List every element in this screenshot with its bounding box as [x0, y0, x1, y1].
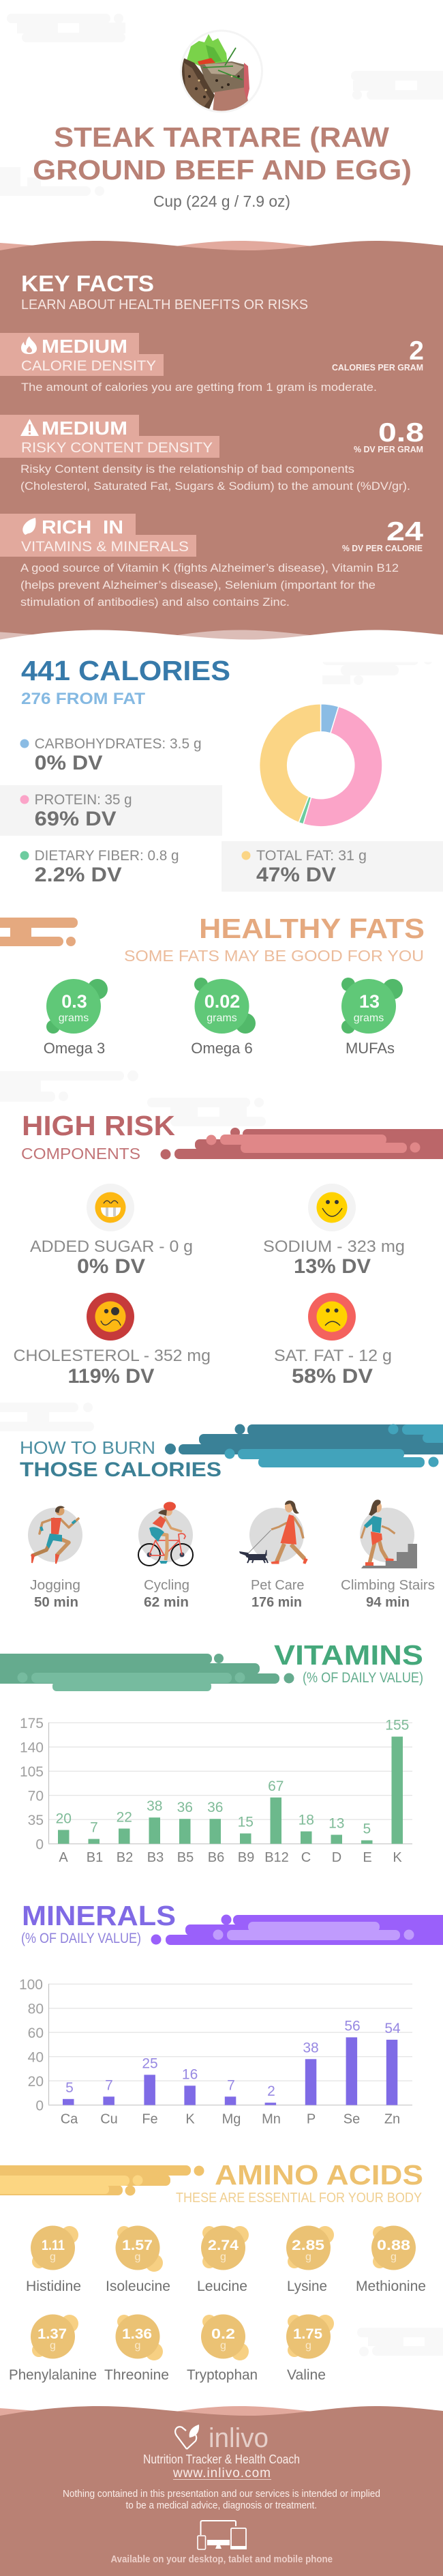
bar chart: vitamins: 22	[117, 1809, 132, 1825]
activity: cycling	[138, 1502, 193, 1566]
amino: histidine: 1.11	[42, 2238, 65, 2253]
bar chart: vitamins: 155	[385, 1718, 409, 1733]
item: sodium: SODIUM - 323 mg	[263, 1238, 405, 1256]
legend: carbohydrates: CARBOHYDRATES: 3.5 g	[35, 736, 202, 752]
item: cholesterol: CHOLESTEROL - 352 mg	[14, 1347, 211, 1365]
bar chart: minerals: 38	[303, 2040, 319, 2055]
subheading: from fat: 276 FROM FAT	[21, 690, 145, 708]
bar chart: vitamins: B5	[177, 1850, 194, 1865]
bar chart: vitamins: A	[59, 1850, 68, 1865]
icon: flame	[21, 336, 37, 354]
amino: methionine: 0.88	[377, 2238, 410, 2253]
badge: MUFAs: grams	[354, 1012, 384, 1024]
value: 24	[386, 517, 423, 546]
disclaimer	[63, 2489, 380, 2511]
bar chart: vitamins: D	[332, 1850, 341, 1865]
amino: lysine: 2.85	[292, 2238, 324, 2253]
activity: climbing stairs	[360, 1499, 417, 1568]
legend: total fat: TOTAL FAT: 31 g	[256, 848, 367, 864]
item: added sugar: ADDED SUGAR - 0 g	[30, 1238, 193, 1256]
amino: lysine: g	[305, 2251, 311, 2263]
logo: inlivo: inlivo	[209, 2423, 269, 2453]
panel: minerals	[19, 1900, 443, 2127]
bar chart: vitamins: 35	[28, 1813, 44, 1828]
legend: dietary fiber	[20, 848, 179, 886]
label: CALORIE DENSITY	[21, 358, 156, 374]
amino: valine: Valine	[287, 2367, 326, 2383]
heading: those calories: THOSE CALORIES	[20, 1459, 222, 1481]
amino: valine: 1.75	[293, 2326, 322, 2342]
activity label: pet care	[251, 1578, 304, 1610]
badge: omega 3: 0.3	[61, 991, 87, 1012]
icon: devices	[198, 2521, 247, 2549]
panel: calories	[0, 655, 443, 892]
activity label: cycling: Cycling	[144, 1578, 189, 1593]
amino: isoleucine: 1.57	[122, 2238, 153, 2253]
legend: carbohydrates	[20, 736, 202, 774]
bar chart: vitamins: 13	[329, 1816, 344, 1831]
unit: % DV PER CALORIE	[342, 543, 423, 553]
title: GROUND BEEF AND EGG)	[33, 154, 412, 186]
badge: MUFAs: 13	[359, 991, 380, 1012]
amino: threonine: g	[135, 2340, 140, 2352]
bar chart: minerals: Fe	[142, 2112, 158, 2127]
amino: tryptophan: g	[220, 2340, 226, 2352]
bar chart: minerals: 7	[227, 2077, 235, 2093]
bar chart: vitamins: K	[393, 1850, 402, 1865]
bar chart: vitamins	[20, 1716, 412, 1865]
bar chart: minerals: Zn	[384, 2112, 400, 2127]
bar chart: vitamins: 7	[90, 1820, 98, 1836]
title: STEAK TARTARE (RAW	[54, 121, 389, 153]
amino: leucine: 2.74	[208, 2238, 239, 2253]
activity: pet care	[239, 1500, 307, 1564]
panel: high risk components	[14, 1110, 443, 1388]
bar chart: vitamins: B12	[264, 1850, 289, 1865]
item: sodium	[263, 1184, 405, 1278]
subheading: SOME FATS MAY BE GOOD FOR YOU	[124, 947, 424, 965]
legend: carbohydrates: 0% DV	[35, 752, 103, 774]
bar chart: vitamins: 105	[20, 1764, 44, 1780]
label: RISKY CONTENT DENSITY	[21, 440, 213, 456]
bar chart: minerals: 80	[28, 2002, 44, 2017]
bar chart: vitamins: 0	[35, 1836, 44, 1853]
description: Risky Content density is the relationship of bad components	[20, 463, 354, 475]
amino: leucine: Leucine	[197, 2279, 247, 2294]
panel: key facts	[0, 241, 443, 662]
badge: omega 6: 0.02	[204, 991, 240, 1012]
amino: threonine: 1.36	[122, 2326, 152, 2342]
value: 2	[409, 336, 424, 366]
legend: protein: 69% DV	[35, 808, 117, 830]
description: The amount of calories you are getting from 1 gram is moderate.	[21, 381, 377, 394]
amino: isoleucine	[106, 2225, 170, 2294]
amino: tryptophan	[187, 2314, 258, 2383]
tagline: Nutrition Tracker & Health Coach	[143, 2453, 300, 2466]
bar chart: minerals: 20	[28, 2074, 44, 2090]
amino: isoleucine: g	[135, 2251, 140, 2263]
icon: steak photo in circle	[180, 30, 263, 113]
bar chart: vitamins: 140	[20, 1740, 44, 1756]
badge: omega 3	[44, 979, 108, 1057]
disclaimer: to be a medical advice, diagnosis or treatment.	[125, 2500, 317, 2511]
rating: MEDIUM	[42, 418, 127, 439]
bar chart: vitamins: 70	[28, 1789, 44, 1804]
bar chart: vitamins: 5	[363, 1821, 371, 1837]
amino: leucine	[197, 2225, 249, 2294]
subheading: THESE ARE ESSENTIAL FOR YOUR BODY	[176, 2191, 422, 2206]
item: saturated fat: 58% DV	[292, 1365, 373, 1388]
bar chart: minerals: 25	[142, 2055, 158, 2071]
amino: methionine: g	[391, 2251, 397, 2263]
bar chart: vitamins: 67	[268, 1779, 284, 1794]
badge: omega 6	[191, 978, 256, 1057]
bar chart: vitamins: 38	[147, 1798, 162, 1814]
description: A good source of Vitamin K (fights Alzheimer’s disease), Vitamin B12	[20, 561, 399, 574]
badge: omega 3: grams	[59, 1012, 89, 1024]
bar chart: vitamins: B3	[147, 1850, 164, 1865]
bar chart: minerals: 100	[19, 1977, 43, 1993]
badge: MUFAs: MUFAs	[346, 1040, 395, 1057]
panel: how to burn those calories	[20, 1424, 443, 1610]
amino: tryptophan: 0.2	[211, 2326, 235, 2342]
amino: valine: g	[305, 2340, 311, 2352]
bar chart: vitamins: C	[301, 1850, 311, 1865]
item: sodium: 13% DV	[294, 1255, 371, 1278]
fact: rich in vitamins and minerals	[0, 514, 423, 609]
bar chart: vitamins: B6	[208, 1850, 224, 1865]
bar chart: vitamins: 36	[177, 1800, 193, 1815]
bar chart: minerals: 7	[105, 2077, 113, 2093]
unit: CALORIES PER GRAM	[332, 362, 423, 372]
amino: phenylalanine: Phenylalanine	[9, 2367, 97, 2383]
bar chart: minerals: Ca	[61, 2112, 78, 2127]
rating: MEDIUM	[42, 336, 127, 357]
bar chart: vitamins: 15	[238, 1815, 254, 1830]
amino: phenylalanine: 1.37	[37, 2326, 67, 2342]
bar chart: vitamins: 20	[56, 1811, 72, 1826]
subheading: components: COMPONENTS	[21, 1145, 140, 1162]
description	[20, 561, 399, 609]
bar chart: vitamins: E	[363, 1850, 372, 1865]
heading: minerals: MINERALS	[22, 1900, 176, 1931]
panel: vitamins	[0, 1639, 423, 1865]
amino: valine	[286, 2314, 334, 2383]
bar chart: minerals: 5	[65, 2080, 74, 2096]
bar chart: vitamins: B1	[87, 1850, 103, 1865]
amino: phenylalanine: g	[50, 2340, 56, 2352]
donut chart	[260, 704, 382, 827]
amino: histidine	[26, 2225, 81, 2294]
amino: threonine: Threonine	[104, 2367, 169, 2383]
heading: how to burn: HOW TO BURN	[20, 1437, 155, 1458]
heading: key facts: KEY FACTS	[21, 271, 154, 296]
item: saturated fat: SAT. FAT - 12 g	[274, 1347, 392, 1365]
bar chart: minerals: Cu	[100, 2112, 118, 2127]
activity label: pet care: Pet Care	[251, 1578, 304, 1593]
fact: risky content density	[0, 415, 424, 493]
subheading: (% OF DAILY VALUE)	[303, 1670, 423, 1686]
rating: RICH IN	[42, 516, 123, 538]
legend: dietary fiber: DIETARY FIBER: 0.8 g	[35, 848, 179, 864]
legend: protein: PROTEIN: 35 g	[35, 792, 132, 808]
item: cholesterol: 119% DV	[68, 1365, 154, 1388]
subheading: LEARN ABOUT HEALTH BENEFITS OR RISKS	[21, 297, 308, 312]
amino: methionine	[356, 2225, 426, 2294]
legend: total fat	[241, 848, 367, 886]
bar chart: minerals: 40	[28, 2049, 44, 2066]
heading: vitamins: VITAMINS	[274, 1639, 423, 1671]
bar chart: minerals: 16	[182, 2066, 198, 2082]
description: stimulation of antibodies) and also contains Zinc.	[20, 596, 290, 609]
description: (helps prevent Alzheimer’s disease), Selenium (important for the	[20, 579, 376, 591]
bar chart: minerals: 2	[267, 2083, 275, 2099]
amino: methionine: Methionine	[356, 2279, 426, 2294]
amino: histidine: g	[50, 2251, 56, 2263]
activity label: cycling	[144, 1578, 189, 1610]
legend: total fat: 47% DV	[256, 864, 336, 886]
badge: omega 6: grams	[207, 1012, 237, 1024]
description: (Cholesterol, Saturated Fat, Sugars & Sodium) to the amount (%DV/gr).	[20, 480, 410, 493]
unit: % DV PER GRAM	[354, 444, 423, 454]
heading: high risk: HIGH RISK	[22, 1110, 175, 1141]
bar chart: minerals: P	[307, 2112, 316, 2127]
bar chart: vitamins: B2	[117, 1850, 133, 1865]
activity label: climbing stairs: Climbing Stairs	[341, 1578, 435, 1593]
amino: isoleucine: Isoleucine	[106, 2279, 170, 2294]
activity label: climbing stairs: 94 min	[366, 1595, 410, 1610]
panel: amino acids	[0, 2159, 426, 2383]
amino: tryptophan: Tryptophan	[187, 2367, 258, 2383]
panel: footer	[0, 2406, 443, 2576]
item: saturated fat	[274, 1293, 392, 1388]
bar chart: minerals: K	[185, 2112, 195, 2127]
legend: protein	[20, 792, 132, 830]
amino: threonine	[104, 2314, 169, 2383]
icon: warning triangle	[20, 419, 39, 436]
activity label: cycling: 62 min	[144, 1595, 189, 1610]
badge: omega 6: Omega 6	[191, 1040, 253, 1057]
activity label: climbing stairs	[341, 1578, 435, 1610]
bar chart: minerals: Mn	[262, 2112, 281, 2127]
badge: MUFAs	[341, 978, 403, 1057]
bar chart: minerals: 60	[28, 2025, 44, 2041]
bar chart: minerals: 56	[344, 2018, 361, 2034]
activity label: jogging	[30, 1578, 80, 1610]
amino: lysine	[286, 2225, 334, 2294]
label: VITAMINS & MINERALS	[21, 539, 189, 555]
legend: dietary fiber: 2.2% DV	[35, 864, 122, 886]
bar chart: minerals	[19, 1977, 412, 2127]
subheading: (% OF DAILY VALUE)	[21, 1931, 141, 1946]
amino: leucine: g	[220, 2251, 226, 2263]
activity label: jogging: 50 min	[34, 1595, 78, 1610]
bar chart: minerals: Se	[343, 2112, 360, 2127]
activity label: pet care: 176 min	[251, 1595, 302, 1610]
amino: lysine: Lysine	[287, 2279, 327, 2294]
bar chart: vitamins: 175	[20, 1716, 44, 1731]
heading: healthy fats: HEALTHY FATS	[199, 913, 425, 944]
description	[20, 463, 410, 493]
amino: phenylalanine	[9, 2314, 97, 2383]
website: www.inlivo.com	[172, 2466, 271, 2480]
heading: 441 calories: 441 CALORIES	[21, 655, 230, 686]
bar chart: minerals: 54	[384, 2021, 401, 2036]
item: cholesterol	[14, 1293, 211, 1388]
icon: leaf	[22, 518, 36, 535]
amino: histidine: Histidine	[26, 2279, 81, 2294]
bar chart: vitamins: 36	[207, 1800, 223, 1815]
activity: jogging	[28, 1506, 82, 1564]
bar chart: minerals: 0	[35, 2098, 44, 2113]
title	[33, 121, 412, 186]
bar chart: vitamins: B9	[238, 1850, 254, 1865]
heading: amino acids: AMINO ACIDS	[215, 2159, 423, 2191]
item: added sugar	[30, 1184, 193, 1278]
serving size: Cup (224 g / 7.9 oz)	[153, 192, 290, 210]
badge: omega 3: Omega 3	[44, 1040, 105, 1057]
value: 0.8	[378, 418, 424, 448]
panel: healthy fats	[0, 913, 425, 1057]
availability note: Available on your desktop, tablet and mobile phone	[110, 2554, 333, 2565]
disclaimer: Nothing contained in this presentation and our services is intended or implied	[63, 2489, 380, 2500]
item: added sugar: 0% DV	[77, 1255, 145, 1278]
bar chart: vitamins: 18	[299, 1812, 314, 1828]
activity label: jogging: Jogging	[30, 1578, 80, 1593]
logo: inlivo	[175, 2423, 269, 2453]
fact: calorie density	[0, 333, 424, 394]
bar chart: minerals: Mg	[222, 2112, 241, 2127]
